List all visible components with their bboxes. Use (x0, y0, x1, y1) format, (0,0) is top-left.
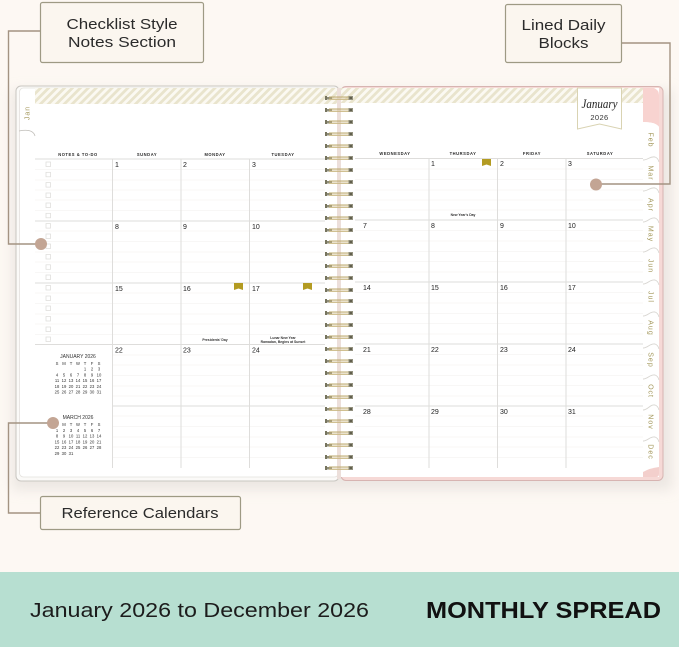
reference calendar: March 2026: 3 (70, 428, 73, 433)
day numbers, right: 22 (431, 347, 439, 354)
reference calendar: January 2026: 15 (83, 378, 88, 383)
month banner: 2026 (590, 113, 609, 122)
weekday headers, left: TUESDAY (271, 152, 295, 157)
reference calendar: March 2026: S (56, 422, 59, 427)
month tabs: May (646, 226, 654, 242)
faint writing lines, right (355, 169, 643, 458)
day numbers, left: 23 (183, 348, 191, 354)
decorative stripe header, left (35, 88, 339, 104)
reference calendar: March 2026: 6 (91, 428, 94, 433)
callout: lined daily blocks: Lined Daily (522, 17, 606, 34)
faint writing lines, left (35, 170, 325, 458)
day numbers, right: 15 (431, 285, 439, 292)
reference calendar: January 2026: 5 (63, 372, 66, 378)
month tabs (643, 88, 659, 477)
weekday headers, left (58, 152, 295, 157)
date range: January 2026 to December 2026 (30, 600, 369, 622)
planner right page (341, 86, 663, 480)
checklist boxes (46, 162, 50, 342)
tab: Jan (19, 89, 35, 136)
day numbers, right: 1 (431, 161, 435, 168)
day numbers, left: 24 (252, 348, 260, 354)
reference calendar: January 2026: S (98, 361, 101, 366)
reference calendar: March 2026: 24 (69, 445, 74, 450)
reference calendar: January 2026: 13 (69, 378, 74, 383)
weekday headers, left: MONDAY (204, 152, 226, 157)
holiday flags, left (234, 283, 312, 290)
reference calendar: January 2026: 9 (91, 372, 94, 378)
reference calendar: March 2026: 11 (76, 434, 81, 438)
weekday headers, right: SATURDAY (587, 151, 613, 156)
month banner: January (582, 96, 618, 111)
reference calendar: January 2026: W (76, 361, 80, 366)
reference calendar: January 2026: 27 (69, 390, 74, 394)
reference calendar: March 2026: 15 (55, 440, 60, 444)
reference calendar: January 2026: 7 (77, 372, 80, 378)
reference calendar: March 2026: T (84, 422, 87, 427)
reference calendar: March 2026: 8 (56, 434, 59, 438)
reference calendar: March 2026: M (62, 422, 66, 427)
day numbers, left: 3 (252, 162, 256, 169)
reference calendar: January 2026: 17 (97, 378, 102, 383)
holiday labels, left: Ramadan, Begins at Sunset (261, 340, 306, 344)
spiral binding (325, 88, 353, 479)
callout: reference calendars: Reference Calendars (62, 505, 218, 522)
day numbers, right: 23 (500, 347, 508, 354)
reference calendar: March 2026: 7 (98, 428, 101, 433)
reference calendar: March 2026: 5 (84, 428, 87, 433)
reference calendar: March 2026: S (98, 422, 101, 427)
callout: checklist style notes section: Checklist Style (66, 16, 178, 33)
holiday labels, left: Presidents' Day (202, 338, 228, 342)
month tabs: Aug (646, 320, 654, 336)
reference calendar: March 2026: 21 (97, 440, 102, 444)
reference calendar: January 2026: 22 (83, 384, 88, 389)
weekday headers, right (379, 151, 613, 156)
reference calendar: March 2026: 9 (63, 434, 66, 438)
day numbers, left: 1 (115, 162, 119, 169)
day numbers, right: 7 (363, 223, 367, 230)
reference calendar: March 2026: 30 (62, 451, 67, 456)
calendar grid, right (355, 158, 643, 468)
reference calendar: January 2026: 30 (90, 390, 95, 394)
reference calendar: March 2026: 28 (97, 445, 102, 450)
reference calendar: March 2026: 12 (83, 434, 88, 438)
month tabs: Jul (646, 291, 654, 303)
callout: reference calendars (8, 417, 240, 530)
reference calendar: January 2026: 6 (70, 372, 73, 378)
month banner (578, 88, 622, 129)
day numbers, right: 3 (568, 161, 572, 168)
callout: checklist style notes section: Notes Section (68, 34, 176, 51)
reference calendar: March 2026: 1 (56, 428, 59, 433)
reference calendar: March 2026: 18 (76, 440, 81, 444)
tab: Jan: Jan (24, 106, 32, 120)
day numbers, right: 31 (568, 409, 576, 416)
month tabs: Jun (646, 259, 654, 273)
reference calendar: March 2026: W (76, 422, 80, 427)
reference calendar: March 2026: 16 (62, 440, 67, 444)
month tabs: Apr (646, 198, 654, 212)
day numbers, right: 10 (568, 223, 576, 230)
reference calendar: March 2026: 31 (69, 451, 74, 456)
reference calendar: March 2026: 2 (63, 428, 66, 433)
reference calendar: March 2026: 23 (62, 445, 67, 450)
bottom banner (0, 572, 679, 647)
reference calendar: March 2026: MARCH 2026 (63, 415, 94, 421)
day numbers, right: 2 (500, 161, 504, 168)
reference calendar: March 2026: 27 (90, 445, 95, 450)
tab: pink back (643, 467, 659, 477)
day numbers, left: 10 (252, 224, 260, 231)
month tabs: Feb (646, 132, 654, 148)
reference calendar: January 2026: 20 (69, 384, 74, 389)
weekday headers, left: SUNDAY (137, 152, 157, 157)
day numbers, right: 14 (363, 285, 371, 292)
reference calendar: January 2026: 11 (55, 378, 60, 383)
tab column (643, 122, 659, 465)
reference calendar: January 2026 (55, 354, 102, 394)
month tabs: Sep (646, 352, 654, 368)
day numbers, right: 28 (363, 409, 371, 416)
reference calendar: January 2026: T (70, 361, 73, 366)
reference calendar: March 2026: 29 (55, 451, 60, 456)
day numbers, right (363, 161, 576, 416)
day numbers, right: 29 (431, 409, 439, 416)
reference calendar: March 2026: 25 (76, 445, 81, 450)
reference calendar: March 2026: 10 (69, 434, 74, 438)
reference calendar: January 2026: 8 (84, 372, 87, 378)
day numbers, right: 24 (568, 347, 576, 354)
tab: pink January (643, 88, 659, 127)
reference calendar: January 2026: 2 (91, 366, 94, 372)
reference calendar: January 2026: F (91, 361, 94, 366)
holiday flag, right (482, 159, 491, 166)
reference calendar: January 2026: S (56, 361, 59, 366)
reference calendar: March 2026: F (91, 422, 94, 427)
reference calendar: January 2026: T (84, 361, 87, 366)
reference calendar: January 2026: 21 (76, 384, 81, 389)
weekday headers, right: FRIDAY (523, 151, 541, 156)
holiday labels, left (202, 336, 306, 344)
weekday headers, right: WEDNESDAY (379, 151, 411, 156)
month tabs: Nov (646, 414, 654, 430)
reference calendar: January 2026: 26 (62, 390, 67, 394)
reference calendar: March 2026: 13 (90, 434, 95, 438)
day numbers, right: 30 (500, 409, 508, 416)
day numbers, right: 8 (431, 223, 435, 230)
reference calendar: March 2026 (55, 415, 102, 456)
day numbers, left: 22 (115, 348, 123, 354)
reference calendar: January 2026: 10 (97, 372, 102, 378)
day numbers, left: 9 (183, 224, 187, 231)
day numbers, left: 2 (183, 162, 187, 169)
reference calendar: March 2026: 4 (77, 428, 80, 433)
spread title: MONTHLY SPREAD (426, 597, 661, 623)
day numbers, right: 17 (568, 285, 576, 292)
weekday headers, right: THURSDAY (450, 151, 476, 156)
calendar grid, left (35, 159, 325, 468)
reference calendar: March 2026: 22 (55, 445, 60, 450)
month tabs: Mar (646, 165, 654, 181)
month tabs: Oct (646, 384, 654, 398)
reference calendar: January 2026: 28 (76, 390, 81, 394)
month tabs: Dec (646, 444, 654, 460)
reference calendar: January 2026: 29 (83, 390, 88, 394)
reference calendar: March 2026: 20 (90, 440, 95, 444)
decorative stripe header, right (341, 88, 643, 103)
day numbers, left: 16 (183, 286, 191, 293)
holiday labels, left: Lunar New Year (270, 336, 296, 340)
day numbers, left: 15 (115, 286, 123, 293)
reference calendar: January 2026: 14 (76, 378, 81, 383)
reference calendar: January 2026: M (62, 361, 66, 366)
reference calendar: March 2026: 14 (97, 434, 102, 438)
reference calendar: March 2026: 17 (69, 440, 74, 444)
callout: lined daily blocks: Blocks (538, 35, 588, 52)
day numbers, right: 16 (500, 285, 508, 292)
callout: lined daily blocks (506, 4, 670, 190)
reference calendar: January 2026: 19 (62, 384, 67, 389)
day numbers, left: 17 (252, 286, 260, 293)
weekday headers, left: NOTES & TO-DO (58, 152, 98, 157)
reference calendar: January 2026: 12 (62, 378, 67, 383)
reference calendar: March 2026: 26 (83, 445, 88, 450)
reference calendar: January 2026: 16 (90, 378, 95, 383)
day numbers, left (115, 162, 260, 354)
reference calendar: January 2026: 31 (97, 390, 102, 394)
reference calendar: January 2026: 23 (90, 384, 95, 389)
reference calendar: March 2026: T (70, 422, 73, 427)
reference calendar: January 2026: 18 (55, 384, 60, 389)
planner left page (16, 86, 339, 481)
reference calendar: January 2026: JANUARY 2026 (60, 354, 96, 360)
reference calendar: January 2026: 4 (56, 372, 59, 378)
reference calendar: January 2026: 3 (98, 366, 101, 372)
day numbers, left: 8 (115, 224, 119, 231)
day numbers, right: 21 (363, 347, 371, 354)
reference calendar: January 2026: 24 (97, 384, 102, 389)
reference calendar: January 2026: 1 (84, 366, 87, 372)
reference calendar: March 2026: 19 (83, 440, 88, 444)
reference calendar: January 2026: 25 (55, 390, 60, 394)
day numbers, right: 9 (500, 223, 504, 230)
callout: checklist style notes section (8, 2, 204, 250)
holiday label, right: New Year's Day (451, 213, 476, 217)
